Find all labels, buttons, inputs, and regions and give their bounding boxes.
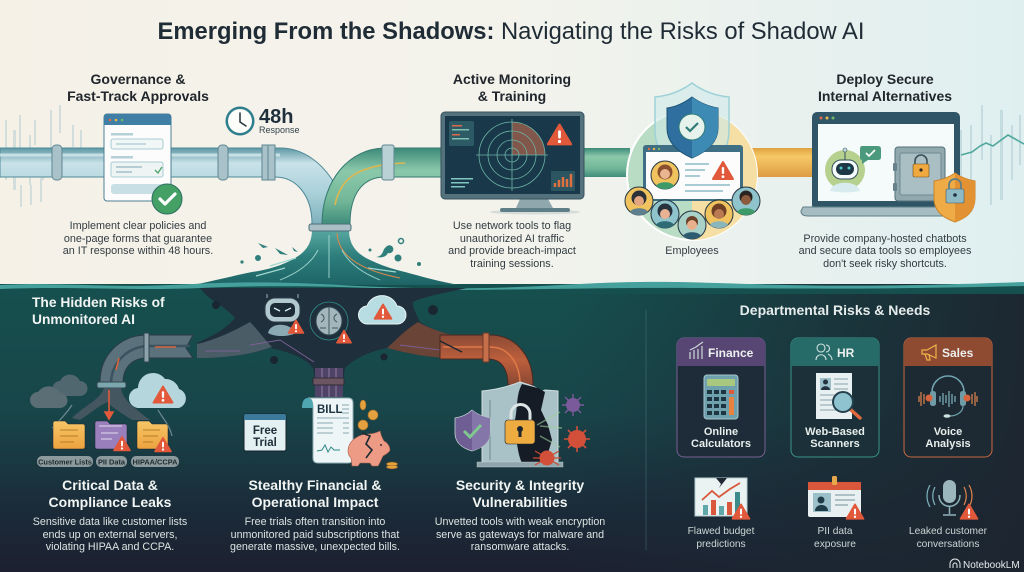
- card: HR: Scanners: [810, 438, 860, 450]
- stealthy body: generate massive, unexpected bills.: [230, 541, 400, 553]
- leaked label: [909, 526, 988, 550]
- critical data body: ends up on external servers,: [43, 529, 177, 541]
- pipe: grey left leak: [72, 333, 193, 420]
- icon: bill: BILL: [317, 404, 343, 416]
- radar sweep: [476, 119, 548, 191]
- pipe collar: left top: [144, 333, 149, 362]
- card: finance: Online: [704, 426, 738, 438]
- hidden risks heading: The Hidden Risks of: [32, 295, 165, 310]
- PII label: PII data: [817, 526, 853, 537]
- 48h response label: [259, 106, 300, 135]
- icon: orange shield: [934, 173, 975, 222]
- label pills: PII Data: [98, 458, 126, 466]
- dark spill under waterline: [197, 288, 467, 380]
- icon: finance chart: [690, 342, 703, 359]
- icon: purple check shield: [455, 410, 490, 451]
- title: Emerging From the Shadows: Navigating the Risks of Shadow AI: [158, 18, 864, 45]
- folder: customer lists: [53, 421, 85, 449]
- icon: free trial: [244, 414, 286, 451]
- security body: serve as gateways for malware and: [436, 529, 604, 541]
- faint data bars and trend line right: [960, 105, 1024, 205]
- critical data heading: Compliance Leaks: [49, 494, 172, 510]
- 48h response label: 48h: [259, 106, 293, 128]
- pipe collars: blue segment: [52, 145, 275, 180]
- card: finance: Calculators: [691, 438, 751, 450]
- deploy heading: Deploy Secure: [836, 71, 934, 87]
- icon: clock: [226, 106, 254, 136]
- critical data body: [33, 516, 187, 553]
- icon: rogue robot: [265, 294, 304, 336]
- departmental heading: Departmental Risks & Needs: [740, 302, 931, 318]
- monitoring body text: unauthorized AI traffic: [460, 233, 565, 245]
- icon: monitor with radar: [441, 112, 584, 214]
- card: HR: Web-Based: [805, 426, 865, 438]
- icon: people: [816, 344, 832, 360]
- employees label: Employees: [665, 245, 719, 257]
- deploy body text: [799, 233, 972, 270]
- PII label: [814, 526, 856, 550]
- deploy body text: don't seek risky shortcuts.: [823, 258, 947, 270]
- security heading: [456, 477, 584, 510]
- employee avatars: [625, 161, 760, 239]
- security body: [435, 516, 605, 553]
- flawed budget label: predictions: [696, 539, 746, 550]
- stealthy heading: Operational Impact: [252, 494, 379, 510]
- water plunge: [192, 224, 460, 285]
- icon: leaking microphone: [927, 480, 978, 519]
- PII label: exposure: [814, 539, 856, 550]
- hidden risks heading: Unmonitored AI: [32, 312, 135, 327]
- security heading: Vulnerabilities: [472, 494, 568, 510]
- card: finance: Finance: [708, 346, 754, 360]
- security body: Unvetted tools with weak encryption: [435, 516, 605, 528]
- critical data heading: Critical Data &: [62, 477, 158, 493]
- icon: PII badge: [808, 476, 864, 519]
- governance body text: Implement clear policies and: [70, 220, 206, 232]
- icon: storm clouds with folders: [30, 373, 186, 467]
- card: sales: Sales: [942, 346, 974, 360]
- monitoring body text: Use network tools to flag: [453, 220, 571, 232]
- pipe collar: rust: [483, 333, 489, 362]
- pipe: center purple: [313, 368, 344, 397]
- card: sales: [904, 338, 992, 457]
- critical data body: violating HIPAA and CCPA.: [46, 541, 174, 553]
- folder: HIPAA: [137, 421, 171, 451]
- icon: padlock: [505, 404, 535, 444]
- icon: flawed budget chart: [695, 478, 750, 519]
- icon: broken piggy bank: [348, 431, 390, 466]
- pipe: rust right: [440, 333, 533, 385]
- icon: chatbot: [825, 148, 865, 192]
- icon: speech bubble check: [860, 146, 881, 164]
- icon: approval form: [104, 114, 182, 214]
- icon: bill: [302, 398, 353, 463]
- governance heading: Fast-Track Approvals: [67, 88, 209, 104]
- icon: resume with magnifier: [816, 373, 860, 419]
- stealthy body: [230, 516, 400, 553]
- governance body text: an IT response within 48 hours.: [63, 245, 213, 257]
- pipe: green inflow: [322, 145, 441, 224]
- monitoring body text: training sessions.: [470, 258, 554, 270]
- icon: coins: [358, 400, 398, 469]
- icon: alert cloud: [359, 296, 406, 324]
- pipe collar: green segment: [382, 145, 394, 180]
- governance heading: Governance &: [91, 71, 185, 87]
- icon: brain: [310, 302, 351, 343]
- icon: broken vault door: [455, 382, 590, 467]
- stealthy body: unmonitored paid subscriptions that: [231, 529, 399, 541]
- critical data body: Sensitive data like customer lists: [33, 516, 187, 528]
- pipe collar: junction: [309, 224, 351, 231]
- pipe collar: center: [313, 378, 344, 385]
- deploy body text: Provide company-hosted chatbots: [803, 233, 967, 245]
- stealthy heading: [248, 477, 382, 510]
- hidden risks heading: [32, 295, 165, 327]
- light upper background: [0, 0, 1024, 290]
- icon: free trial: Trial: [253, 437, 277, 449]
- pipe: blue left inflow: [0, 145, 347, 224]
- icon: laptop with chatbot and safe: [801, 112, 975, 222]
- waterline: [0, 282, 1024, 294]
- dark underground background: [0, 284, 1024, 572]
- monitoring body text: and provide breach-impact: [448, 245, 576, 257]
- security heading: Security & Integrity: [456, 477, 584, 493]
- card: sales: Analysis: [925, 438, 971, 450]
- pipe: yellow connector: [752, 148, 816, 177]
- flawed budget label: Flawed budget: [688, 526, 755, 537]
- icon: megaphone: [922, 345, 936, 360]
- governance heading: [67, 71, 209, 104]
- stealthy heading: Stealthy Financial &: [248, 477, 382, 493]
- icon: safe: [893, 147, 945, 201]
- label pills: HIPAA/CCPA: [133, 458, 178, 466]
- card: HR: HR: [837, 346, 855, 360]
- card: HR: [791, 338, 879, 457]
- icon: viruses: [533, 394, 590, 466]
- icon: calculator: [704, 375, 738, 419]
- NotebookLM watermark: NotebookLM: [963, 560, 1020, 571]
- monitoring heading: [453, 71, 571, 104]
- critical data heading: [49, 477, 172, 510]
- folder: PII data: [95, 421, 130, 450]
- storm clouds: [30, 375, 88, 408]
- stealthy body: Free trials often transition into: [245, 516, 385, 528]
- icon: free trial: Free: [253, 425, 277, 437]
- 48h response label: Response: [259, 125, 300, 135]
- deploy body text: and secure data tools so employees: [799, 245, 972, 257]
- governance body text: one-page forms that guarantee: [64, 233, 212, 245]
- monitoring heading: Active Monitoring: [453, 71, 571, 87]
- card: sales: Voice: [934, 426, 962, 438]
- pipe: green connector: [580, 148, 630, 177]
- icon: employees shield group: [625, 83, 760, 240]
- leaked label: conversations: [917, 539, 979, 550]
- governance body text: [63, 220, 213, 257]
- icon: headset with voice waves: [919, 376, 977, 418]
- monitoring body text: [448, 220, 576, 270]
- deploy heading: Internal Alternatives: [818, 88, 952, 104]
- icon: green check badge: [152, 184, 182, 214]
- monitoring heading: & Training: [478, 88, 546, 104]
- security body: ransomware attacks.: [471, 541, 569, 553]
- label pills: Customer Lists: [38, 458, 92, 466]
- pipe roots: spreading leak: [72, 388, 150, 420]
- faint data bars left: [5, 105, 82, 207]
- splash droplets: [240, 238, 421, 266]
- card: finance: [677, 338, 765, 457]
- alert cloud left: [129, 373, 186, 408]
- label pills: [37, 456, 179, 467]
- flawed budget label: [688, 526, 755, 550]
- deploy heading: [818, 71, 952, 104]
- leaked label: Leaked customer: [909, 526, 988, 537]
- pipe collar: left bottom: [97, 382, 126, 388]
